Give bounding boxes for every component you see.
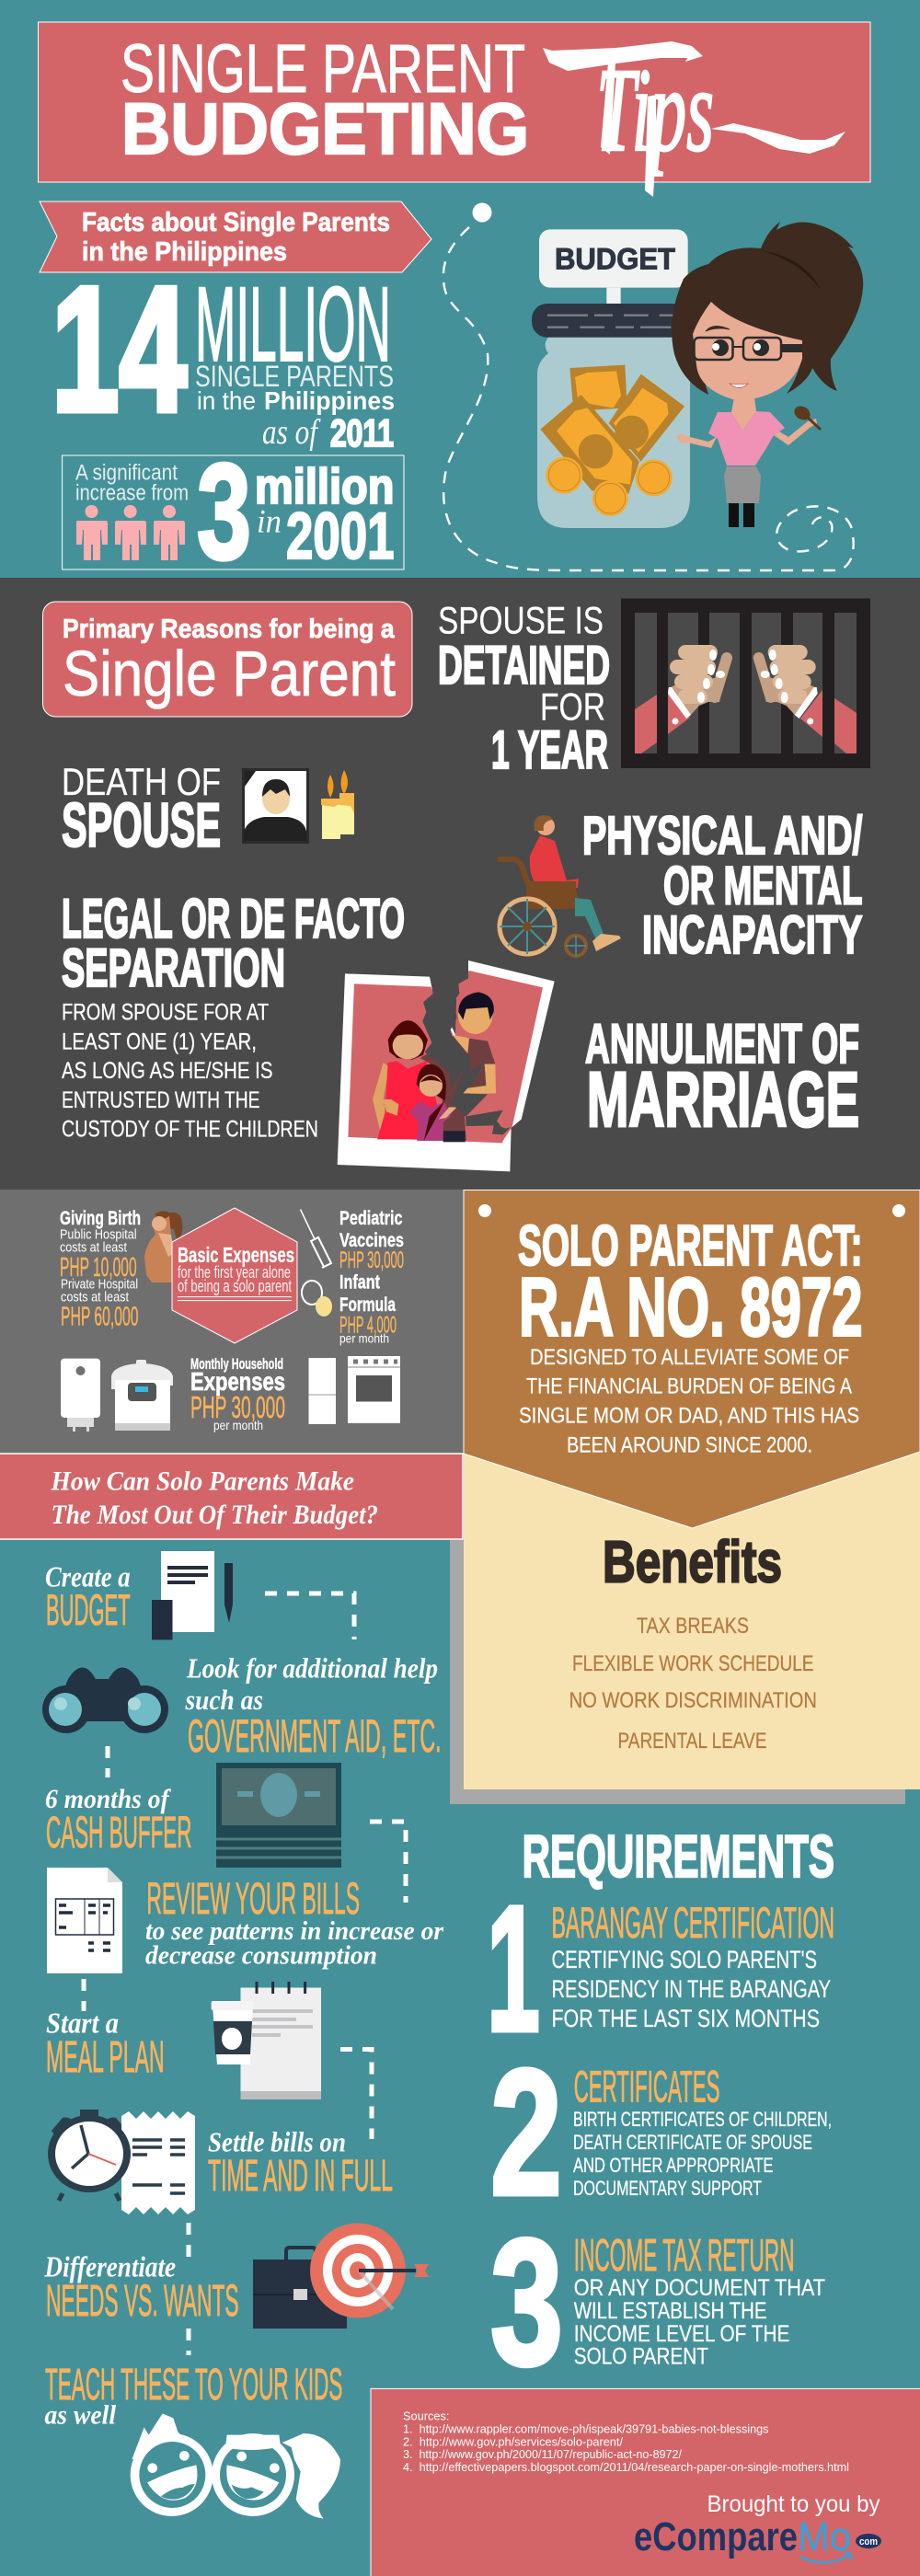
tip: meal plan [46, 2006, 165, 2082]
requirement 3: INCOME LEVEL OF THE [574, 2321, 789, 2347]
sources list: Sources: [403, 2410, 449, 2423]
text: giving birth costs: PHP 10,000 [60, 1253, 137, 1282]
ribbon: facts about single parents: Facts about Single Parents [82, 208, 390, 237]
statistic: 14 million: 14 [52, 249, 187, 448]
hexagon: basic expenses [172, 1208, 297, 1343]
reason: legal or de facto separation [62, 888, 405, 1143]
tip: look for additional help: such as [185, 1684, 263, 1716]
logo: eCompareMo: com [859, 2536, 878, 2547]
title banner: SINGLE PARENT [121, 30, 525, 107]
callout: increase from 3 million in 2001: 2001 [286, 500, 394, 573]
text: giving birth costs: PHP 60,000 [61, 1303, 138, 1332]
tip: cash buffer [45, 1784, 191, 1857]
text: monthly household expenses [190, 1355, 285, 1432]
text: pediatric vaccines and infant formula: Vaccines [339, 1230, 404, 1251]
statistic: 14 million: as of [262, 413, 321, 452]
reason: legal or de facto separation: SEPARATION [62, 938, 285, 998]
text: monthly household expenses: per month [213, 1418, 263, 1432]
text: pediatric vaccines and infant formula: Pediatric [339, 1208, 403, 1229]
logo: eCompareMo: eCompare [634, 2514, 798, 2559]
sources list: 4. http://effectivepapers.blogspot.com/2011/04/research-paper-on-single-mothers.html [403, 2461, 849, 2474]
icon: stove [348, 1356, 400, 1423]
icon: pacifier [302, 1281, 332, 1317]
reason: legal or de facto separation: CUSTODY OF THE CHILDREN [62, 1117, 318, 1143]
tip: review your bills [145, 1875, 444, 1971]
callout: increase from 3 million in 2001: million [255, 459, 394, 514]
callout: increase from 3 million in 2001: increase from [75, 480, 189, 506]
panel heading: primary reasons: Single Parent [63, 638, 396, 709]
text: pediatric vaccines and infant formula: PHP 4,000 [339, 1312, 397, 1338]
requirement 1: 1 [487, 1869, 540, 2069]
icon: memorial photo [242, 768, 309, 844]
sources list [403, 2410, 849, 2474]
requirement 3: OR ANY DOCUMENT THAT [574, 2275, 825, 2301]
reason: annulment of marriage [585, 1013, 859, 1143]
sources list: 1. http://www.rappler.com/move-ph/ispeak/39791-babies-not-blessings [403, 2422, 769, 2435]
logo: eCompareMo: Mo [798, 2514, 851, 2559]
panel heading: primary reasons [42, 602, 412, 717]
illustration: wheelchair [498, 815, 621, 956]
reason: spouse detained: 1 YEAR [491, 720, 608, 780]
title banner [39, 22, 870, 197]
tip: settle bills: Settle bills on [208, 2126, 346, 2158]
icon: happy kids faces [131, 2413, 340, 2519]
icon: document and pen [152, 1551, 233, 1639]
text: MILLION [195, 266, 391, 384]
solo parent act header: SINGLE MOM OR DAD, AND THIS HAS [519, 1404, 859, 1429]
reason: death of spouse [62, 760, 221, 860]
text: giving birth costs: Public Hospital [60, 1227, 137, 1243]
hexagon: basic expenses: for the first year alone [178, 1263, 291, 1282]
requirement 1 [487, 1869, 834, 2069]
text: CASH BUFFER [46, 1809, 191, 1857]
benefits list [569, 1529, 817, 1754]
reason: spouse detained: FOR [540, 684, 605, 729]
icon: three people [76, 505, 185, 560]
solo parent act header: THE FINANCIAL BURDEN OF BEING A [526, 1374, 852, 1399]
reason: spouse detained: DETAINED [438, 636, 610, 696]
requirement 2: 2 [490, 2032, 562, 2233]
text: BUDGET [46, 1585, 131, 1634]
sources list: 2. http://www.gov.ph/services/solo-parent/ [403, 2435, 624, 2448]
text: pediatric vaccines and infant formula: per month [339, 1331, 389, 1346]
hexagon: basic expenses: of being a solo parent [178, 1277, 292, 1295]
banner: how can solo parents make the most: The Most Out Of Their Budget? [52, 1500, 378, 1530]
icon: stack of cash [216, 1763, 341, 1868]
fist left [668, 645, 727, 725]
reason: legal or de facto separation: FROM SPOUSE FOR AT [62, 1000, 269, 1026]
tip: differentiate needs vs wants [44, 2250, 239, 2326]
benefits list: PARENTAL LEAVE [618, 1729, 767, 1754]
text: giving birth costs [60, 1208, 141, 1332]
requirement 2: DEATH CERTIFICATE OF SPOUSE [573, 2131, 812, 2154]
requirement 1: RESIDENCY IN THE BARANGAY [552, 1975, 831, 2003]
text: monthly household expenses: Expenses [190, 1367, 285, 1396]
connector dashes [84, 1593, 406, 2355]
illustration: torn family photo [338, 960, 555, 1171]
requirement 3: SOLO PARENT [574, 2344, 708, 2370]
ribbon: facts about single parents: in the Philippines [82, 237, 287, 267]
panel heading: primary reasons: Primary Reasons for being a [63, 615, 395, 644]
tip: review your bills: decrease consumption [145, 1942, 377, 1971]
callout: increase from 3 million in 2001: in [257, 502, 282, 539]
benefits panel [464, 1190, 920, 1789]
panel: basic expenses [60, 1208, 404, 1432]
text: GOVERNMENT AID, ETC. [188, 1710, 442, 1762]
text: giving birth costs: costs at least [60, 1240, 128, 1255]
tip: teach these to your kids [44, 2361, 342, 2431]
statistic: 14 million: in the [197, 386, 256, 415]
statistic: 14 million: Philippines [264, 386, 395, 415]
text: giving birth costs: costs at least [61, 1290, 130, 1305]
panel: sources and credits [371, 2388, 920, 2576]
tip: review your bills: REVIEW YOUR BILLS [146, 1875, 360, 1924]
icon: water heater [61, 1359, 100, 1432]
illustration: mother with spoon [672, 222, 863, 527]
panel: sources and credits: Brought to you by [707, 2491, 880, 2517]
text: giving birth costs: Private Hospital [61, 1277, 138, 1293]
sources list: 3. http://www.gov.ph/2000/11/07/republic-act-no-8972/ [403, 2448, 683, 2461]
text: NEEDS VS. WANTS [46, 2277, 239, 2326]
icon: binoculars [42, 1667, 168, 1733]
icon: refrigerator [309, 1358, 336, 1424]
requirement 1: FOR THE LAST SIX MONTHS [552, 2005, 820, 2032]
hexagon: basic expenses: Basic Expenses [178, 1243, 294, 1267]
requirement 2: DOCUMENTARY SUPPORT [573, 2177, 762, 2200]
icon: pregnant woman [144, 1211, 182, 1282]
text: TIME AND IN FULL [208, 2152, 393, 2201]
requirement 2: CERTIFICATES [574, 2063, 719, 2111]
banner: how can solo parents make the most [0, 1454, 463, 1539]
text: pediatric vaccines and infant formula: Infant [339, 1272, 380, 1294]
benefits list: Benefits [603, 1529, 782, 1595]
text: pediatric vaccines and infant formula [339, 1208, 404, 1346]
tip: cash buffer: 6 months of [45, 1784, 171, 1814]
reason: spouse detained [438, 598, 610, 780]
requirement 1: CERTIFYING SOLO PARENT'S [552, 1946, 817, 1973]
benefits list: FLEXIBLE WORK SCHEDULE [572, 1651, 813, 1676]
requirement 3 [490, 2202, 825, 2403]
icon: bill document [47, 1868, 122, 1973]
text: pediatric vaccines and infant formula: PHP 30,000 [339, 1248, 404, 1273]
icon: briefcase and target [253, 2223, 429, 2329]
callout: increase from 3 million in 2001: 3 [197, 436, 251, 588]
tip: meal plan: Start a [46, 2006, 119, 2039]
requirement 2: AND OTHER APPROPRIATE [573, 2154, 774, 2177]
callout: increase from 3 million in 2001: A significant [75, 460, 178, 486]
icon: jail bars with hands [621, 598, 870, 768]
statistic: 14 million: 2011 [330, 411, 394, 454]
solo parent act header [464, 1190, 920, 1528]
dashed path [443, 202, 854, 570]
reason: legal or de facto separation: ENTRUSTED WITH THE [62, 1087, 259, 1113]
requirement 3: 3 [490, 2202, 563, 2403]
text: monthly household expenses: PHP 30,000 [190, 1390, 285, 1424]
benefits list: TAX BREAKS [637, 1614, 749, 1639]
requirement 2 [490, 2032, 832, 2233]
statistic: 14 million [52, 249, 395, 454]
benefits list: NO WORK DISCRIMINATION [569, 1688, 817, 1713]
text: pediatric vaccines and infant formula: Formula [339, 1294, 396, 1316]
text: MEAL PLAN [46, 2033, 165, 2082]
text: giving birth costs: Giving Birth [60, 1208, 141, 1229]
title banner: BUDGETING [121, 87, 529, 169]
reason: legal or de facto separation: LEGAL OR DE FACTO [62, 888, 405, 949]
icon: rice cooker [111, 1360, 173, 1431]
tip: teach these to your kids: as well [44, 2400, 117, 2431]
banner: how can solo parents make the most: How Can Solo Parents Make [51, 1466, 354, 1496]
tip: look for additional help [185, 1652, 442, 1762]
illustration: budget jar [532, 229, 690, 528]
tip: settle bills [208, 2126, 393, 2201]
requirement 3: WILL ESTABLISH THE [574, 2298, 767, 2324]
icon: candles [321, 770, 354, 839]
title banner: Tips [596, 44, 714, 177]
text: TEACH THESE TO YOUR KIDS [45, 2361, 342, 2409]
tip: differentiate needs vs wants: Differentiate [44, 2250, 176, 2283]
reason: physical or mental incapacity [582, 806, 863, 965]
illustration: budget jar: BUDGET [555, 242, 675, 275]
icon: notebook and coffee cup [212, 1982, 321, 2099]
solo parent act header: BEEN AROUND SINCE 2000. [567, 1432, 812, 1457]
reason: death of spouse: SPOUSE [62, 790, 221, 860]
tip: review your bills: to see patterns in increase or [145, 1917, 444, 1946]
icon: alarm clock and receipt [48, 2110, 195, 2214]
tip: create a budget: Create a [45, 1559, 131, 1593]
tip: look for additional help: Look for additional help [186, 1652, 438, 1684]
reason: spouse detained: SPOUSE IS [438, 598, 604, 642]
fist right [759, 645, 818, 725]
solo parent act header: DESIGNED TO ALLEVIATE SOME OF [530, 1345, 849, 1370]
statistic: 14 million: SINGLE PARENTS [195, 360, 394, 393]
reason: legal or de facto separation: LEAST ONE (1) YEAR, [62, 1029, 257, 1055]
callout: increase from 3 million in 2001 [63, 436, 404, 588]
reason: death of spouse: DEATH OF [62, 760, 221, 803]
ribbon: facts about single parents [40, 201, 431, 272]
text: monthly household expenses: Monthly Household [190, 1355, 283, 1373]
reason: legal or de facto separation: AS LONG AS HE/SHE IS [62, 1058, 272, 1084]
tip: create a budget [45, 1559, 131, 1634]
icon: syringe [300, 1209, 331, 1268]
